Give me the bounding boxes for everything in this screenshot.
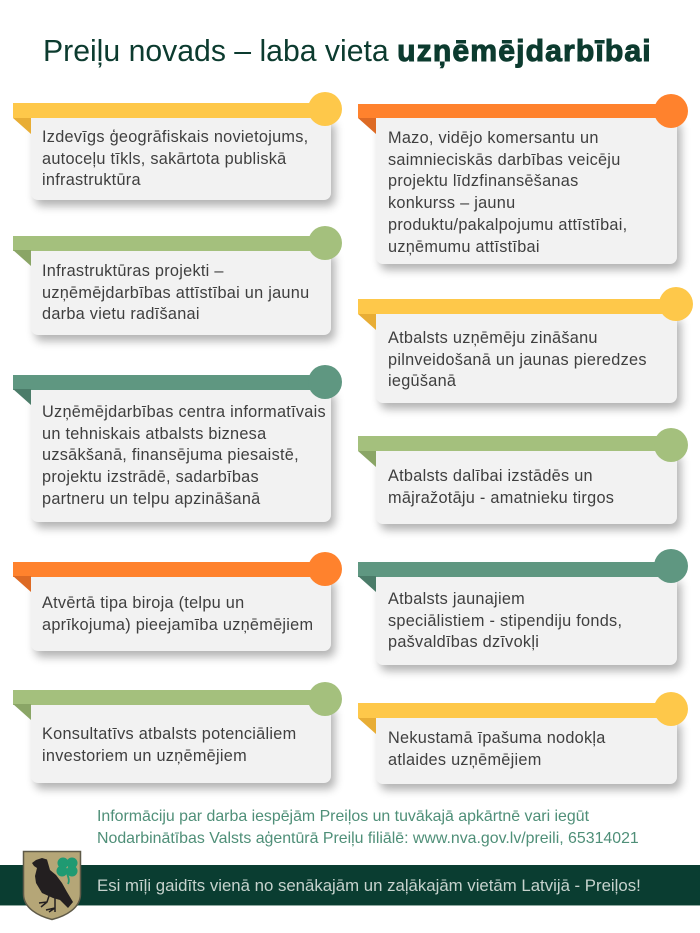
text: uzņēmumu attīstībai [388, 238, 540, 256]
panel: co-financing contest [358, 94, 688, 276]
text: projektu izstrādē, sadarbības [42, 468, 259, 486]
text: pilnveidošanā un jaunas pieredzes [388, 351, 647, 369]
text: autoceļu tīkls, sakārtota publiskā [42, 150, 286, 168]
text: speciālistiem - stipendiju fonds, [388, 612, 622, 630]
panel: knowledge support [358, 287, 693, 414]
title: Preiļu novads – laba vieta uzņēmējdarbībai [43, 35, 652, 68]
panel: exhibitions support [358, 428, 688, 536]
information text [97, 808, 639, 846]
text: konkurss – jaunu [388, 194, 515, 212]
panel: young specialists [358, 549, 688, 676]
text: investoriem un uzņēmējiem [42, 747, 247, 765]
footer text: Esi mīļi gaidīts vienā no senākajām un zaļākajām vietām Latvijā - Preiļos! [97, 876, 641, 895]
panel: infrastructure projects [13, 226, 342, 346]
text: Atbalsts uzņēmēju zināšanu [388, 329, 598, 347]
text: mājražotāju - amatnieku tirgos [388, 489, 614, 507]
panel: consulting support [13, 682, 342, 794]
footer band [0, 865, 700, 906]
text: Konsultatīvs atbalsts potenciāliem [42, 725, 296, 743]
text: Izdevīgs ģeogrāfiskais novietojums, [42, 128, 308, 146]
information text: Nodarbinātības Valsts aģentūrā Preiļu filiālē: www.nva.gov.lv/preili, 65314021 [97, 830, 639, 846]
text: Mazo, vidējo komersantu un [388, 129, 599, 147]
text: darba vietu radīšanai [42, 305, 200, 323]
text: Atbalsts dalībai izstādēs un [388, 467, 593, 485]
text: produktu/pakalpojumu attīstībai, [388, 216, 627, 234]
text: infrastruktūra [42, 171, 141, 189]
text: iegūšanā [388, 372, 456, 390]
icon: coat of arms [22, 850, 82, 920]
text: partneru un telpu apzināšanā [42, 490, 260, 508]
text: Atvērtā tipa biroja (telpu un [42, 594, 244, 612]
panel: geographic location [13, 92, 342, 212]
text: atlaides uzņēmējiem [388, 751, 542, 769]
panel: property tax [358, 692, 688, 796]
text: projektu līdzfinansēšanas [388, 172, 578, 190]
panel: business centre support [13, 365, 342, 534]
text: aprīkojuma) pieejamība uzņēmējiem [42, 616, 313, 634]
text: Uzņēmējdarbības centra informatīvais [42, 403, 326, 421]
text: saimnieciskās darbības veicēju [388, 151, 621, 169]
text: pašvaldības dzīvokļi [388, 633, 539, 651]
text: Infrastruktūras projekti – [42, 262, 224, 280]
panel: open-type office [13, 552, 342, 662]
text: uzņēmējdarbības attīstībai un jaunu [42, 284, 309, 302]
text: un tehniskais atbalsts biznesa [42, 425, 266, 443]
text: Atbalsts jaunajiem [388, 590, 525, 608]
text: Nekustamā īpašuma nodokļa [388, 729, 606, 747]
text: uzsākšanā, finansējuma piesaistē, [42, 446, 299, 464]
information text: Informāciju par darba iespējām Preiļos un tuvākajā apkārtnē vari iegūt [97, 808, 589, 825]
